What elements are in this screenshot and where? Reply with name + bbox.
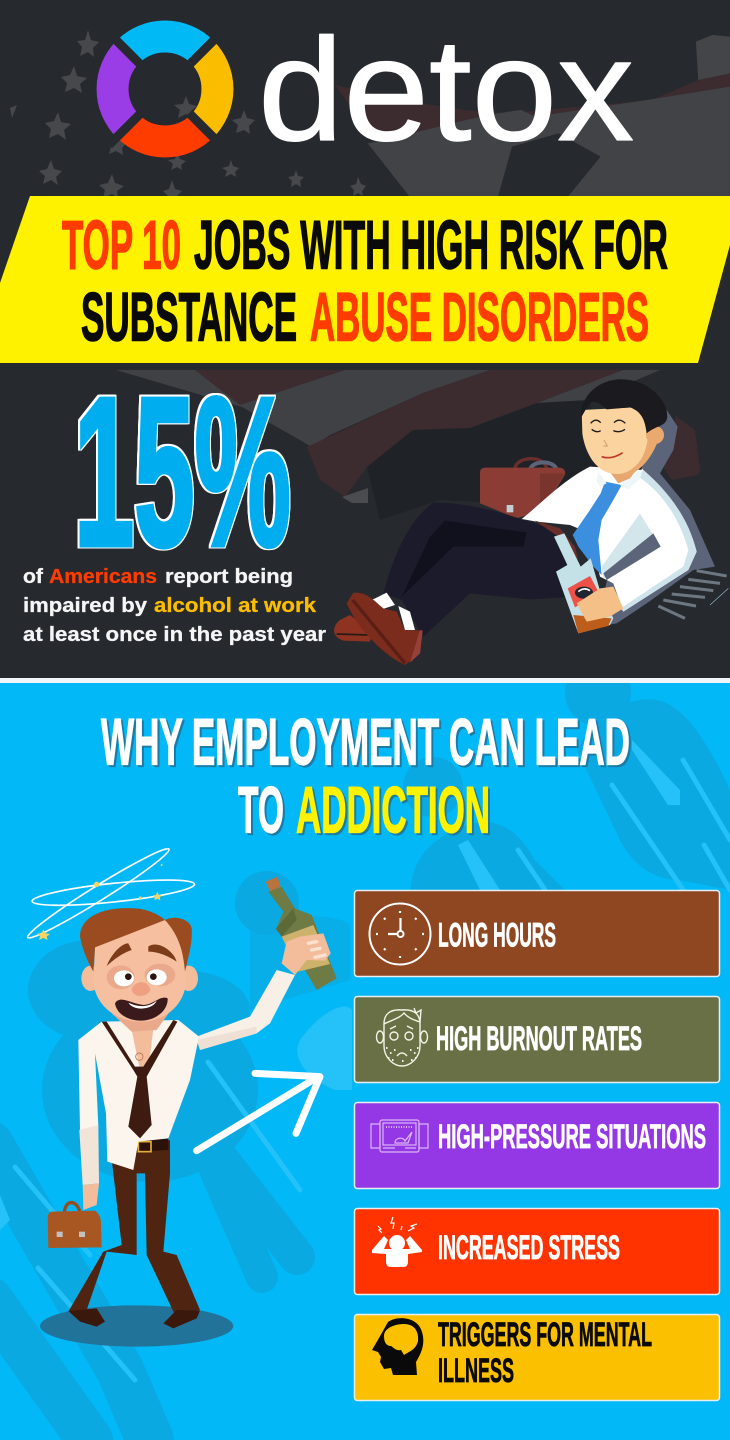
- raised arm: [197, 970, 295, 1050]
- title banner: [0, 196, 730, 363]
- stat description: [23, 566, 326, 646]
- stat description: of: [23, 566, 43, 588]
- far shoe: [334, 615, 372, 642]
- hand: [577, 587, 623, 622]
- card: triggers for mental illness: [354, 1314, 720, 1400]
- icon: stressed person: [372, 1217, 422, 1267]
- stat description: report being: [165, 566, 293, 588]
- shadow behind man: [597, 410, 715, 627]
- eyes and mouth: [591, 420, 625, 423]
- trousers: [68, 1140, 200, 1315]
- card: increased stress: [354, 1208, 720, 1294]
- bottle: [266, 877, 337, 990]
- belt: [535, 521, 578, 560]
- dizzy stars: [37, 864, 163, 940]
- chest skin: [132, 1028, 153, 1070]
- eyes: [114, 970, 134, 986]
- near shoe: [347, 593, 423, 665]
- bottle: [554, 533, 613, 633]
- illustration: relaxed office worker with bottle: [334, 379, 728, 665]
- dizzy swirl: [24, 843, 196, 944]
- title text: [62, 206, 668, 356]
- logo wordmark: detox: [258, 8, 634, 171]
- shoes: [68, 1308, 105, 1327]
- big statistic: 15%: 15%: [74, 353, 291, 590]
- worker silhouette watermarks: [28, 660, 730, 1182]
- section heading: ADDICTION: [296, 772, 490, 846]
- socks: [372, 593, 395, 610]
- eye bags: [107, 965, 135, 989]
- trousers: [383, 503, 573, 637]
- hair: [581, 379, 667, 433]
- shirt: [522, 467, 697, 612]
- stat description: impaired by: [23, 595, 148, 617]
- card: triggers for mental illness: ILLNESS: [438, 1352, 514, 1390]
- section heading: [101, 704, 630, 846]
- icon: clock: [370, 904, 430, 964]
- card label: LONG HOURS: [438, 916, 556, 954]
- collar: [597, 468, 643, 489]
- stat description: at least once in the past year: [23, 624, 326, 646]
- nose: [132, 982, 150, 996]
- chest swirl: [136, 1053, 143, 1060]
- title text: TOP 10: [62, 206, 181, 284]
- tie: [102, 1020, 177, 1138]
- shirt: [78, 1020, 199, 1170]
- icon: pressure gauge: [371, 1120, 428, 1152]
- floor shadow: [40, 1305, 233, 1347]
- stat description: Americans: [49, 566, 157, 588]
- arrow: [197, 1073, 320, 1151]
- lower hand and briefcase: [83, 1183, 99, 1210]
- hair: [80, 908, 192, 972]
- panel: blue lower background: [0, 660, 730, 1440]
- title text: SUBSTANCE: [81, 278, 297, 356]
- card: long hours: [354, 890, 720, 976]
- briefcase: [480, 459, 565, 518]
- tie: [573, 482, 622, 575]
- white divider: [0, 678, 730, 683]
- card: high-pressure situations: [354, 1102, 720, 1188]
- icon: brain in head: [372, 1318, 423, 1375]
- icon: tired face: [376, 1008, 428, 1066]
- panel: dark header background: [0, 0, 730, 678]
- face: [93, 919, 186, 1022]
- mouth: [115, 998, 168, 1021]
- illustration: dizzy drunk worker: [24, 843, 337, 1347]
- stat description: alcohol at work: [154, 595, 317, 617]
- flag watermark below banner: [116, 370, 700, 520]
- eyebrows: [107, 943, 132, 966]
- logo mark: four-colour ring: [109, 33, 221, 145]
- card: high burnout rates: [354, 996, 720, 1082]
- logo: [109, 8, 634, 171]
- section heading: TO: [238, 772, 284, 846]
- neck: [112, 1007, 173, 1032]
- neck and face: [608, 463, 642, 483]
- hand on bottle: [282, 933, 331, 975]
- ears: [81, 966, 100, 991]
